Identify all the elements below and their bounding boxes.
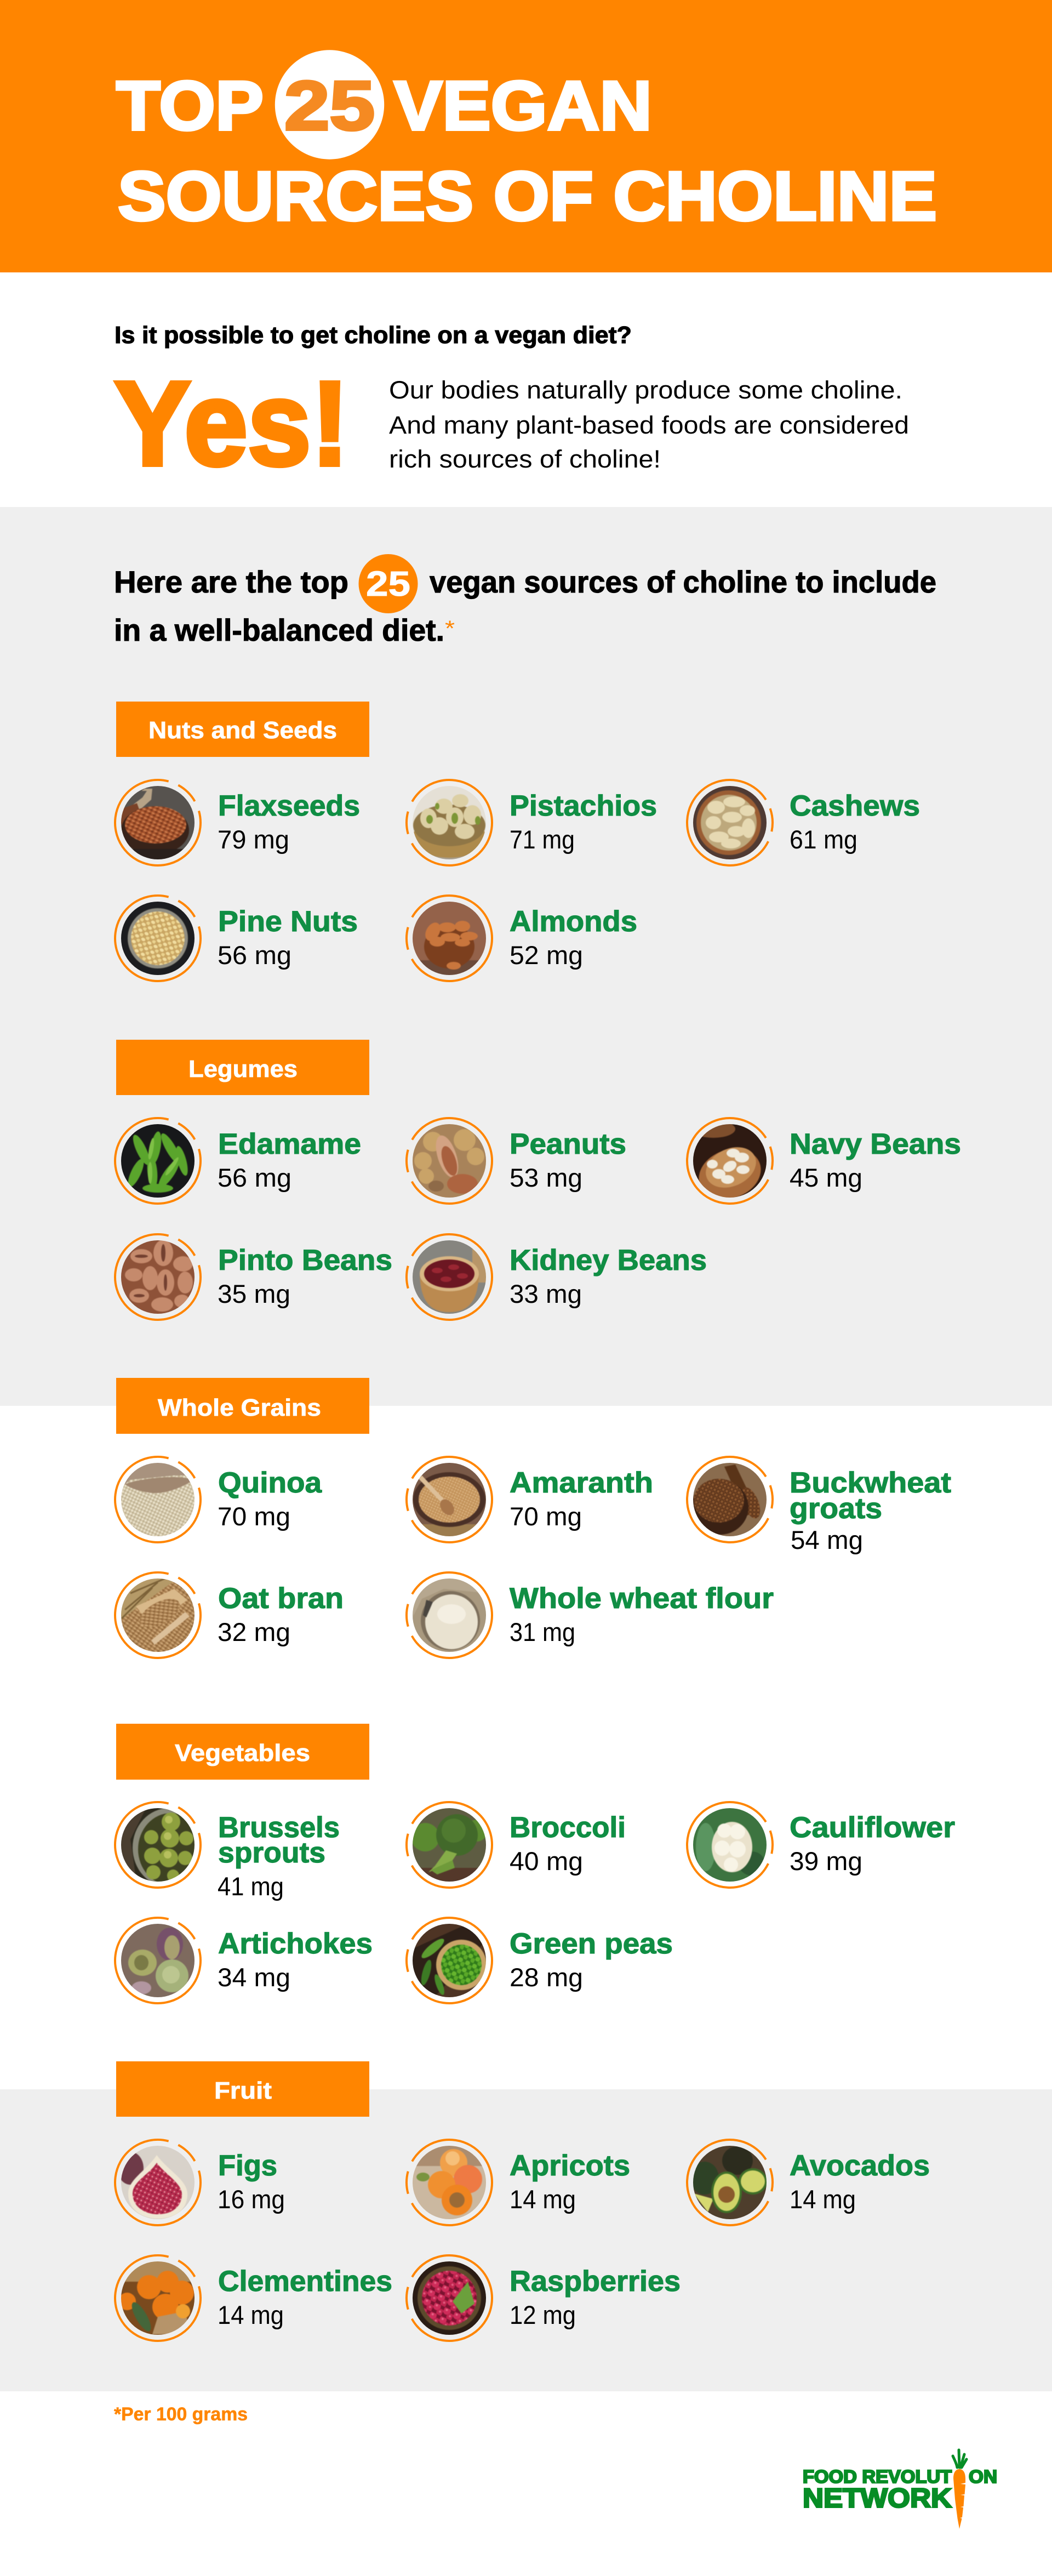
name: Oat bran bbox=[218, 1582, 344, 1615]
banner: Legumes: Legumes bbox=[188, 1056, 298, 1082]
banner: Whole Grains: Whole Grains bbox=[158, 1394, 321, 1421]
photo: brussels sprouts bbox=[119, 1806, 205, 1887]
name: Cauliflower bbox=[790, 1811, 955, 1844]
ring bbox=[391, 1218, 508, 1336]
logo wordmark line 1: FOOD REVOLUT bbox=[803, 2466, 952, 2487]
photo: pinto beans bbox=[119, 1239, 196, 1315]
title bbox=[116, 50, 937, 235]
name: Whole wheat flour bbox=[510, 1582, 774, 1615]
grey band: upper bbox=[0, 507, 1052, 1406]
banner: Vegetables bbox=[116, 1724, 369, 1780]
name: Quinoa bbox=[218, 1467, 322, 1499]
icon: carrot bbox=[953, 2469, 965, 2529]
item: Quinoa bbox=[114, 1456, 322, 1543]
banner: Vegetables: Vegetables bbox=[175, 1740, 310, 1766]
ring bbox=[100, 1787, 216, 1903]
item: Oat bran bbox=[114, 1571, 342, 1659]
photo: apricots bbox=[411, 2144, 488, 2221]
title: second line: SOURCES OF CHOLINE bbox=[118, 157, 937, 235]
item: Pine Nuts bbox=[114, 894, 357, 982]
icon: carrot leaves bbox=[953, 2450, 967, 2467]
amount: 56 mg bbox=[218, 941, 291, 970]
amount: 70 mg bbox=[218, 1502, 290, 1531]
name line 2: sprouts bbox=[218, 1837, 325, 1869]
photo: artichokes bbox=[119, 1922, 196, 1999]
amount: 14 mg bbox=[510, 2185, 576, 2214]
item: Cauliflower bbox=[676, 1791, 955, 1899]
name: Clementines bbox=[218, 2265, 392, 2298]
name: Almonds bbox=[510, 905, 637, 938]
ring bbox=[100, 1902, 216, 2019]
ring bbox=[100, 2240, 216, 2356]
amount: 79 mg bbox=[218, 825, 289, 854]
photo: kidney beans bbox=[411, 1239, 488, 1315]
amount: 35 mg bbox=[218, 1279, 290, 1308]
name: Pine Nuts bbox=[218, 905, 358, 938]
intro paragraph: Our bodies naturally produce some choline. bbox=[389, 376, 902, 404]
amount: 70 mg bbox=[510, 1502, 582, 1531]
name: Amaranth bbox=[510, 1467, 653, 1499]
item: Whole wheat flour bbox=[391, 1557, 774, 1674]
name: Navy Beans bbox=[790, 1128, 961, 1160]
amount: 53 mg bbox=[510, 1163, 582, 1192]
ring bbox=[391, 1102, 508, 1219]
heading badge number: 25 bbox=[366, 564, 410, 603]
name: Buckwheat bbox=[790, 1467, 951, 1499]
amount: 14 mg bbox=[790, 2185, 856, 2214]
item: Apricots bbox=[391, 2124, 630, 2241]
ring bbox=[391, 2239, 508, 2357]
item: Clementines bbox=[100, 2240, 392, 2356]
name line 2: groats bbox=[790, 1492, 882, 1525]
name: Broccoli bbox=[510, 1811, 626, 1844]
photo: edamame bbox=[119, 1122, 196, 1199]
photo: pistachios bbox=[413, 786, 486, 859]
banner: Fruit: Fruit bbox=[214, 2077, 272, 2104]
ring bbox=[100, 1441, 216, 1558]
footnote asterisk: * bbox=[445, 617, 455, 641]
ring bbox=[391, 880, 508, 997]
name: Kidney Beans bbox=[510, 1244, 707, 1276]
photo: flour bbox=[411, 1577, 488, 1654]
amount: 54 mg bbox=[791, 1525, 863, 1554]
photo: cauliflower bbox=[691, 1806, 768, 1883]
ring bbox=[391, 1786, 508, 1903]
amount: 56 mg bbox=[218, 1163, 291, 1192]
photo: almonds bbox=[411, 900, 488, 977]
banner: Nuts and Seeds: Nuts and Seeds bbox=[148, 717, 337, 744]
intro paragraph: rich sources of choline! bbox=[389, 445, 661, 473]
name: Cashews bbox=[790, 790, 920, 822]
section heading bbox=[114, 554, 936, 647]
item: Buckwheat groats bbox=[686, 1456, 951, 1554]
item: Edamame bbox=[114, 1117, 361, 1205]
title: TOP: TOP bbox=[116, 67, 264, 145]
amount: 71 mg bbox=[510, 825, 575, 854]
banner: Whole Grains bbox=[116, 1378, 369, 1434]
ring bbox=[676, 1445, 784, 1554]
banner: Fruit bbox=[116, 2061, 369, 2117]
ring bbox=[100, 880, 216, 996]
item: Amaranth bbox=[405, 1456, 652, 1543]
name: Green peas bbox=[510, 1928, 673, 1960]
amount: 33 mg bbox=[510, 1279, 582, 1308]
ring bbox=[100, 765, 216, 881]
item: Pistachios bbox=[405, 779, 656, 867]
item: Almonds bbox=[405, 894, 637, 982]
grey band: lower bbox=[0, 2089, 1052, 2391]
banner: Nuts and Seeds bbox=[116, 702, 369, 757]
photo: avocados bbox=[690, 2144, 768, 2221]
name: Figs bbox=[218, 2150, 277, 2182]
ring bbox=[391, 2124, 508, 2241]
name: Pistachios bbox=[510, 790, 657, 822]
ring bbox=[676, 2128, 784, 2237]
photo: clementines bbox=[118, 2260, 196, 2336]
ring bbox=[100, 1219, 216, 1335]
title: VEGAN: VEGAN bbox=[394, 67, 652, 145]
header band bbox=[0, 0, 1052, 272]
photo: pine nuts bbox=[119, 900, 196, 977]
badge number: 25 bbox=[284, 67, 375, 145]
photo: cashews bbox=[691, 784, 768, 861]
amount: 12 mg bbox=[510, 2300, 576, 2329]
item: Artichokes bbox=[100, 1902, 373, 2019]
photo: flaxseeds bbox=[121, 786, 195, 859]
section heading: in a well-balanced diet. bbox=[114, 613, 444, 647]
ring bbox=[100, 2124, 216, 2241]
amount: 31 mg bbox=[510, 1617, 575, 1646]
ring bbox=[391, 764, 508, 881]
amount: 16 mg bbox=[218, 2185, 285, 2214]
amount: 41 mg bbox=[218, 1872, 284, 1901]
ring bbox=[100, 1557, 216, 1673]
photo: oat bran bbox=[119, 1577, 196, 1654]
name: Edamame bbox=[218, 1128, 361, 1160]
name: Peanuts bbox=[510, 1128, 626, 1160]
item: Kidney Beans bbox=[405, 1233, 706, 1321]
name: Raspberries bbox=[510, 2265, 681, 2298]
amount: 52 mg bbox=[510, 941, 583, 970]
intro question: Is it possible to get choline on a vegan diet? bbox=[115, 322, 632, 349]
logo wordmark ON: ON bbox=[969, 2466, 997, 2487]
intro paragraph bbox=[389, 376, 909, 473]
ring bbox=[676, 1791, 784, 1899]
amount: 61 mg bbox=[790, 825, 857, 854]
intro paragraph: And many plant-based foods are considered bbox=[389, 411, 909, 439]
photo: peanuts bbox=[411, 1122, 488, 1199]
amount: 32 mg bbox=[218, 1617, 290, 1646]
item: Broccoli bbox=[391, 1786, 626, 1903]
item: Raspberries bbox=[391, 2239, 681, 2357]
item: Cashews bbox=[686, 779, 919, 867]
footnote: *Per 100 grams bbox=[114, 2404, 248, 2425]
ring bbox=[676, 1107, 784, 1215]
photo: amaranth bbox=[413, 1463, 486, 1536]
amount: 34 mg bbox=[218, 1963, 290, 1992]
item: Avocados bbox=[676, 2128, 930, 2237]
item: Flaxseeds bbox=[114, 779, 359, 867]
photo: quinoa bbox=[119, 1461, 196, 1538]
ring bbox=[100, 1103, 216, 1219]
item: Pinto Beans bbox=[114, 1233, 391, 1321]
amount: 28 mg bbox=[510, 1963, 583, 1992]
ring bbox=[676, 768, 784, 877]
badge circle 25 bbox=[275, 50, 384, 159]
logo: Food Revolution Network bbox=[803, 2450, 997, 2529]
amount: 39 mg bbox=[790, 1846, 862, 1876]
item: Brussels sprouts bbox=[100, 1787, 340, 1903]
Yes! headline: Yes! bbox=[115, 357, 349, 491]
name: Apricots bbox=[510, 2150, 630, 2182]
item: Navy Beans bbox=[686, 1117, 960, 1205]
item: Figs bbox=[100, 2124, 285, 2241]
photo: buckwheat bbox=[691, 1461, 768, 1538]
ring bbox=[391, 1902, 508, 2019]
amount: 40 mg bbox=[510, 1846, 583, 1876]
name: Brussels bbox=[218, 1811, 340, 1844]
name: Flaxseeds bbox=[218, 790, 360, 822]
photo: broccoli bbox=[411, 1806, 488, 1884]
name: Avocados bbox=[790, 2150, 930, 2182]
ring bbox=[391, 1441, 508, 1558]
section heading: Here are the top bbox=[114, 565, 348, 599]
banner: Legumes bbox=[116, 1040, 369, 1095]
photo: figs bbox=[117, 2144, 196, 2221]
photo: green peas bbox=[411, 1922, 488, 1999]
photo: navy beans bbox=[693, 1124, 767, 1198]
heading badge bbox=[358, 554, 418, 613]
amount: 14 mg bbox=[218, 2300, 284, 2329]
section heading: vegan sources of choline to include bbox=[430, 565, 936, 599]
name: Artichokes bbox=[218, 1928, 373, 1960]
photo: raspberries bbox=[411, 2260, 488, 2336]
ring bbox=[391, 1557, 508, 1674]
logo wordmark line 2: NETWORK bbox=[803, 2483, 952, 2514]
item: Green peas bbox=[391, 1902, 673, 2019]
name: Pinto Beans bbox=[218, 1244, 392, 1276]
item: Peanuts bbox=[405, 1117, 626, 1205]
amount: 45 mg bbox=[790, 1163, 862, 1192]
